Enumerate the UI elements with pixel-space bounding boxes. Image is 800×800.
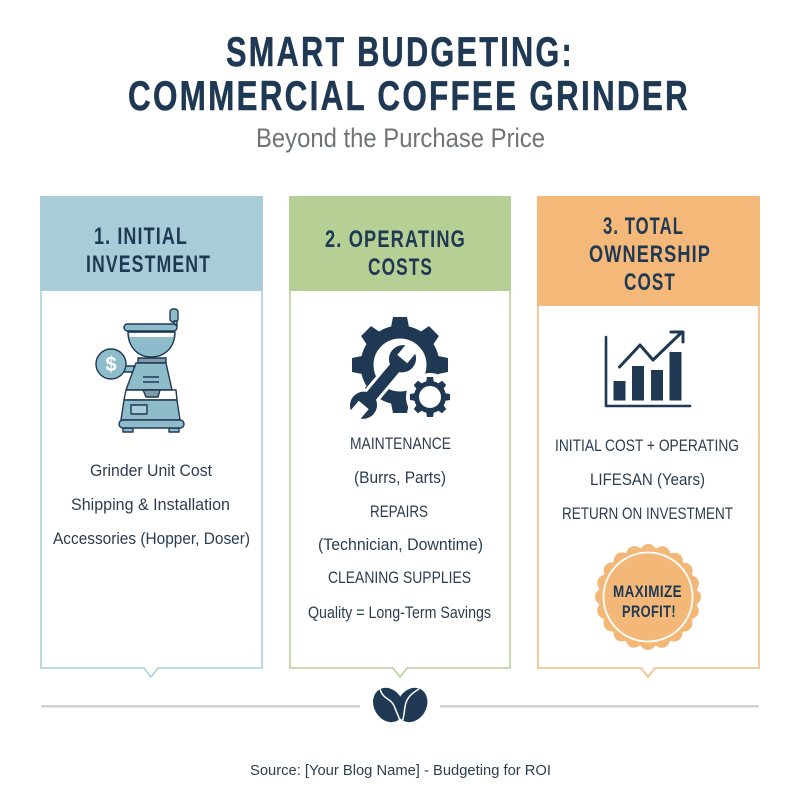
text: initial investment items: Grinder Unit Cost	[90, 462, 212, 480]
text: ownership cost items: LIFESAN (Years)	[590, 471, 705, 489]
panel header: initial investment	[40, 196, 263, 291]
text: ownership cost items: RETURN ON INVESTMENT	[562, 505, 733, 523]
panel: operating costs	[289, 196, 511, 677]
panel header: initial investment: 1. INITIAL	[94, 223, 188, 250]
panel header: initial investment: INVESTMENT	[86, 251, 211, 278]
title: SMART BUDGETING:	[226, 28, 574, 75]
icon: coffee grinder with dollar coin: $	[106, 354, 117, 376]
text: operating cost items: (Technician, Downtime)	[318, 536, 483, 554]
text: ownership cost items: INITIAL COST + OPERATING	[555, 437, 739, 455]
icon: coffee beans	[367, 682, 434, 728]
panel header: total ownership cost: 3. TOTAL	[603, 213, 684, 240]
text: operating cost items: MAINTENANCE	[350, 435, 451, 453]
panel: initial investment	[40, 196, 263, 677]
icon: gear and wrench	[345, 317, 454, 423]
panel header: operating costs	[289, 196, 511, 291]
text: operating cost items: REPAIRS	[370, 503, 428, 521]
text: operating cost items: Quality = Long-Term Savings	[308, 604, 491, 622]
subtitle: Beyond the Purchase Price	[256, 123, 545, 153]
text: operating cost items	[308, 435, 491, 622]
source line: Source: [Your Blog Name] - Budgeting for ROI	[250, 762, 551, 779]
badge: maximize profit: MAXIMIZE	[613, 583, 682, 601]
panel header: total ownership cost: OWNERSHIP	[589, 241, 711, 268]
title	[128, 28, 690, 119]
panel header: total ownership cost: COST	[624, 269, 676, 296]
text: initial investment items	[53, 462, 250, 548]
badge: maximize profit	[598, 548, 698, 646]
icon: rising bar chart	[606, 332, 690, 406]
icon: coffee grinder with dollar coin	[96, 309, 184, 432]
panel header: operating costs: COSTS	[368, 254, 433, 281]
text: initial investment items: Accessories (Hopper, Doser)	[53, 530, 250, 548]
badge: maximize profit: PROFIT!	[622, 603, 676, 621]
text: operating cost items: CLEANING SUPPLIES	[328, 569, 471, 587]
panel header: total ownership cost	[537, 196, 760, 306]
panel header: operating costs: 2. OPERATING	[325, 226, 466, 253]
panel: total ownership cost	[537, 196, 760, 677]
text: operating cost items: (Burrs, Parts)	[354, 469, 446, 487]
text: initial investment items: Shipping & Installation	[71, 496, 230, 514]
text: ownership cost items	[555, 437, 739, 523]
